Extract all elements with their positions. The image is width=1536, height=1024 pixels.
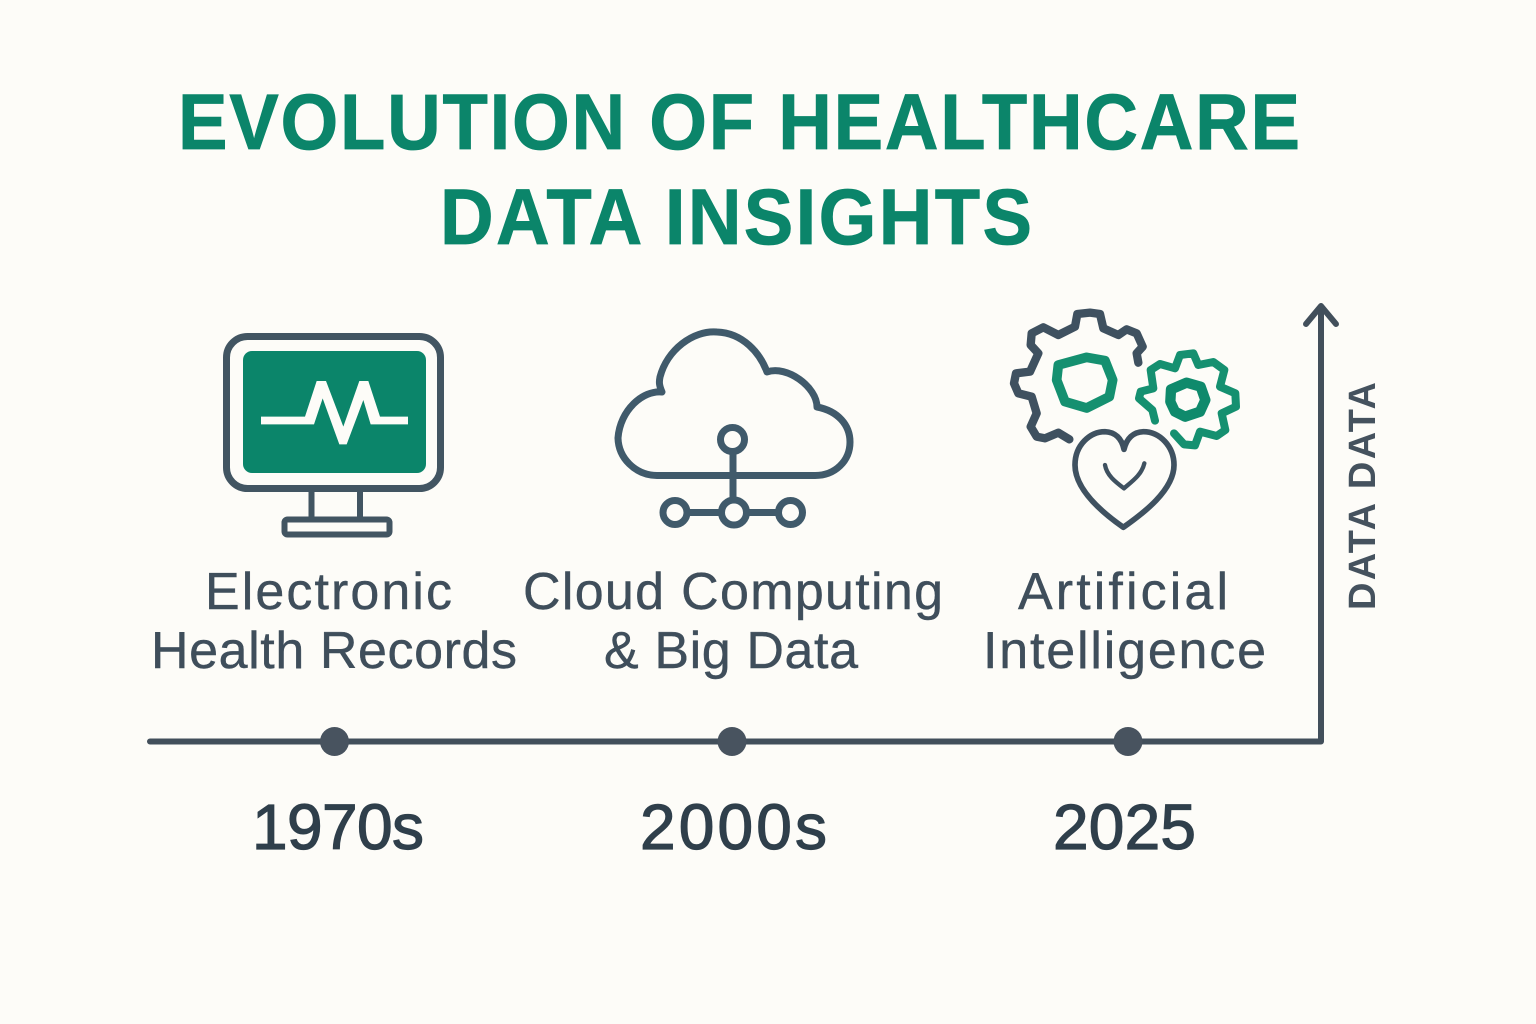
year: 1970s: 1970s — [252, 791, 424, 863]
label: Cloud Computing & Big Data: & Big Data — [604, 622, 858, 680]
icon: gears and heart — [1014, 313, 1236, 527]
label: Electronic Health Records — [151, 563, 517, 680]
label: Electronic Health Records: Health Records — [151, 622, 517, 680]
label: Cloud Computing & Big Data — [523, 563, 943, 680]
large dark gear — [1014, 313, 1143, 439]
label: Artificial Intelligence — [983, 563, 1266, 680]
icon: cloud with network nodes — [618, 332, 850, 525]
axis label: DATA DATA: DATA DATA — [1342, 382, 1384, 610]
year: 2025: 2025 — [1053, 791, 1196, 863]
label: Electronic Health Records: Electronic — [205, 563, 452, 621]
timeline markers — [320, 727, 1142, 756]
small green gear — [1139, 353, 1236, 445]
icon: monitor with heartbeat — [226, 336, 440, 534]
title: EVOLUTION OF HEALTHCARE — [178, 79, 1300, 167]
large gear hub — [1057, 357, 1113, 408]
title: DATA INSIGHTS — [440, 174, 1032, 262]
label: Artificial Intelligence: Intelligence — [983, 622, 1266, 680]
label: Artificial Intelligence: Artificial — [1018, 563, 1228, 621]
small gear hub — [1170, 383, 1205, 417]
timeline axis with arrow — [150, 306, 1336, 742]
year: 2000s: 2000s — [640, 791, 827, 863]
label: Cloud Computing & Big Data: Cloud Computing — [523, 563, 943, 621]
heart check — [1105, 463, 1144, 488]
title — [178, 79, 1300, 262]
heart — [1075, 432, 1174, 527]
